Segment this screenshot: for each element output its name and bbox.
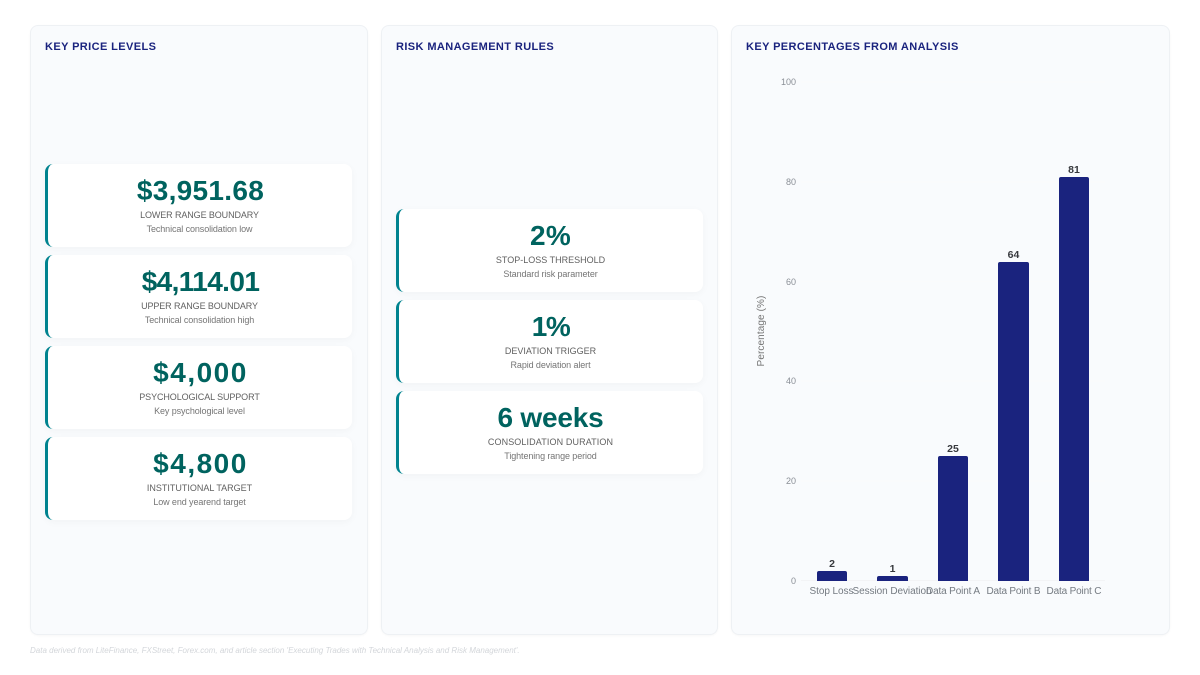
y axis tick labels: 20	[786, 476, 796, 486]
card: upper range boundary: UPPER RANGE BOUNDARY	[141, 300, 258, 310]
bar value labels: 25	[947, 443, 959, 455]
card: institutional target: $4,800	[153, 448, 248, 479]
y axis tick labels	[781, 77, 796, 586]
card: psychological support	[45, 346, 352, 429]
y axis title: Percentage (%)	[756, 296, 767, 366]
card: institutional target: INSTITUTIONAL TARGET	[147, 482, 252, 492]
bar value labels: 81	[1068, 164, 1080, 176]
y axis tick labels: 100	[781, 77, 796, 87]
category labels: Stop Loss	[810, 586, 854, 597]
panel: risk management rules	[381, 25, 718, 635]
card: stop-loss threshold: STOP-LOSS THRESHOLD	[496, 254, 605, 264]
card: deviation trigger: DEVIATION TRIGGER	[505, 346, 596, 356]
heading: risk management rules: RISK MANAGEMENT RULES	[396, 41, 554, 53]
panel: key price levels	[30, 25, 368, 635]
bar value labels	[829, 164, 1080, 575]
bar value labels: 1	[890, 563, 896, 575]
category labels: Data Point A	[926, 586, 980, 597]
y axis tick labels: 40	[786, 376, 796, 386]
card: upper range boundary: Technical consolidation high	[145, 314, 254, 324]
category labels	[810, 586, 1102, 597]
card: consolidation duration	[396, 391, 703, 474]
heading: key percentages: KEY PERCENTAGES FROM ANALYSIS	[746, 41, 959, 53]
y axis tick labels: 60	[786, 277, 796, 287]
bar value labels: 64	[1008, 249, 1019, 261]
card: stop-loss threshold: 2%	[530, 220, 571, 251]
card: stop-loss threshold: Standard risk parameter	[503, 268, 598, 278]
bars	[817, 177, 1089, 581]
source note: Data derived from LiteFinance, FXStreet, Forex.com, and article section 'Executing Trades with Technical Analysis and Risk Management'.	[30, 646, 520, 655]
card: deviation trigger: 1%	[532, 311, 569, 342]
card: consolidation duration: 6 weeks	[497, 402, 604, 433]
card: lower range boundary: Technical consolidation low	[147, 224, 252, 234]
card: consolidation duration: Tightening range period	[504, 450, 597, 460]
card: deviation trigger: Rapid deviation alert	[511, 360, 590, 370]
card: upper range boundary	[45, 255, 352, 338]
card: psychological support: $4,000	[153, 357, 248, 388]
card: deviation trigger	[396, 300, 703, 383]
card: lower range boundary	[45, 164, 352, 247]
category labels: Data Point C	[1046, 586, 1102, 597]
card: institutional target	[45, 437, 352, 520]
y axis tick labels: 80	[786, 177, 796, 187]
category labels: Data Point B	[986, 586, 1041, 597]
card: stop-loss threshold	[396, 209, 703, 292]
card: upper range boundary: $4,114.01	[142, 266, 259, 297]
card: consolidation duration: CONSOLIDATION DURATION	[488, 436, 613, 446]
card: psychological support: Key psychological level	[154, 406, 245, 416]
card: lower range boundary: LOWER RANGE BOUNDARY	[140, 210, 259, 220]
heading: key price levels: KEY PRICE LEVELS	[45, 41, 156, 53]
panel: key percentages from analysis	[731, 25, 1170, 635]
category labels: Session Deviation	[852, 586, 932, 597]
card: lower range boundary: $3,951.68	[137, 175, 264, 206]
y axis tick labels: 0	[791, 576, 796, 586]
card: psychological support: PSYCHOLOGICAL SUPPORT	[139, 392, 260, 402]
bar value labels: 2	[829, 558, 835, 570]
card: institutional target: Low end yearend target	[153, 496, 246, 506]
